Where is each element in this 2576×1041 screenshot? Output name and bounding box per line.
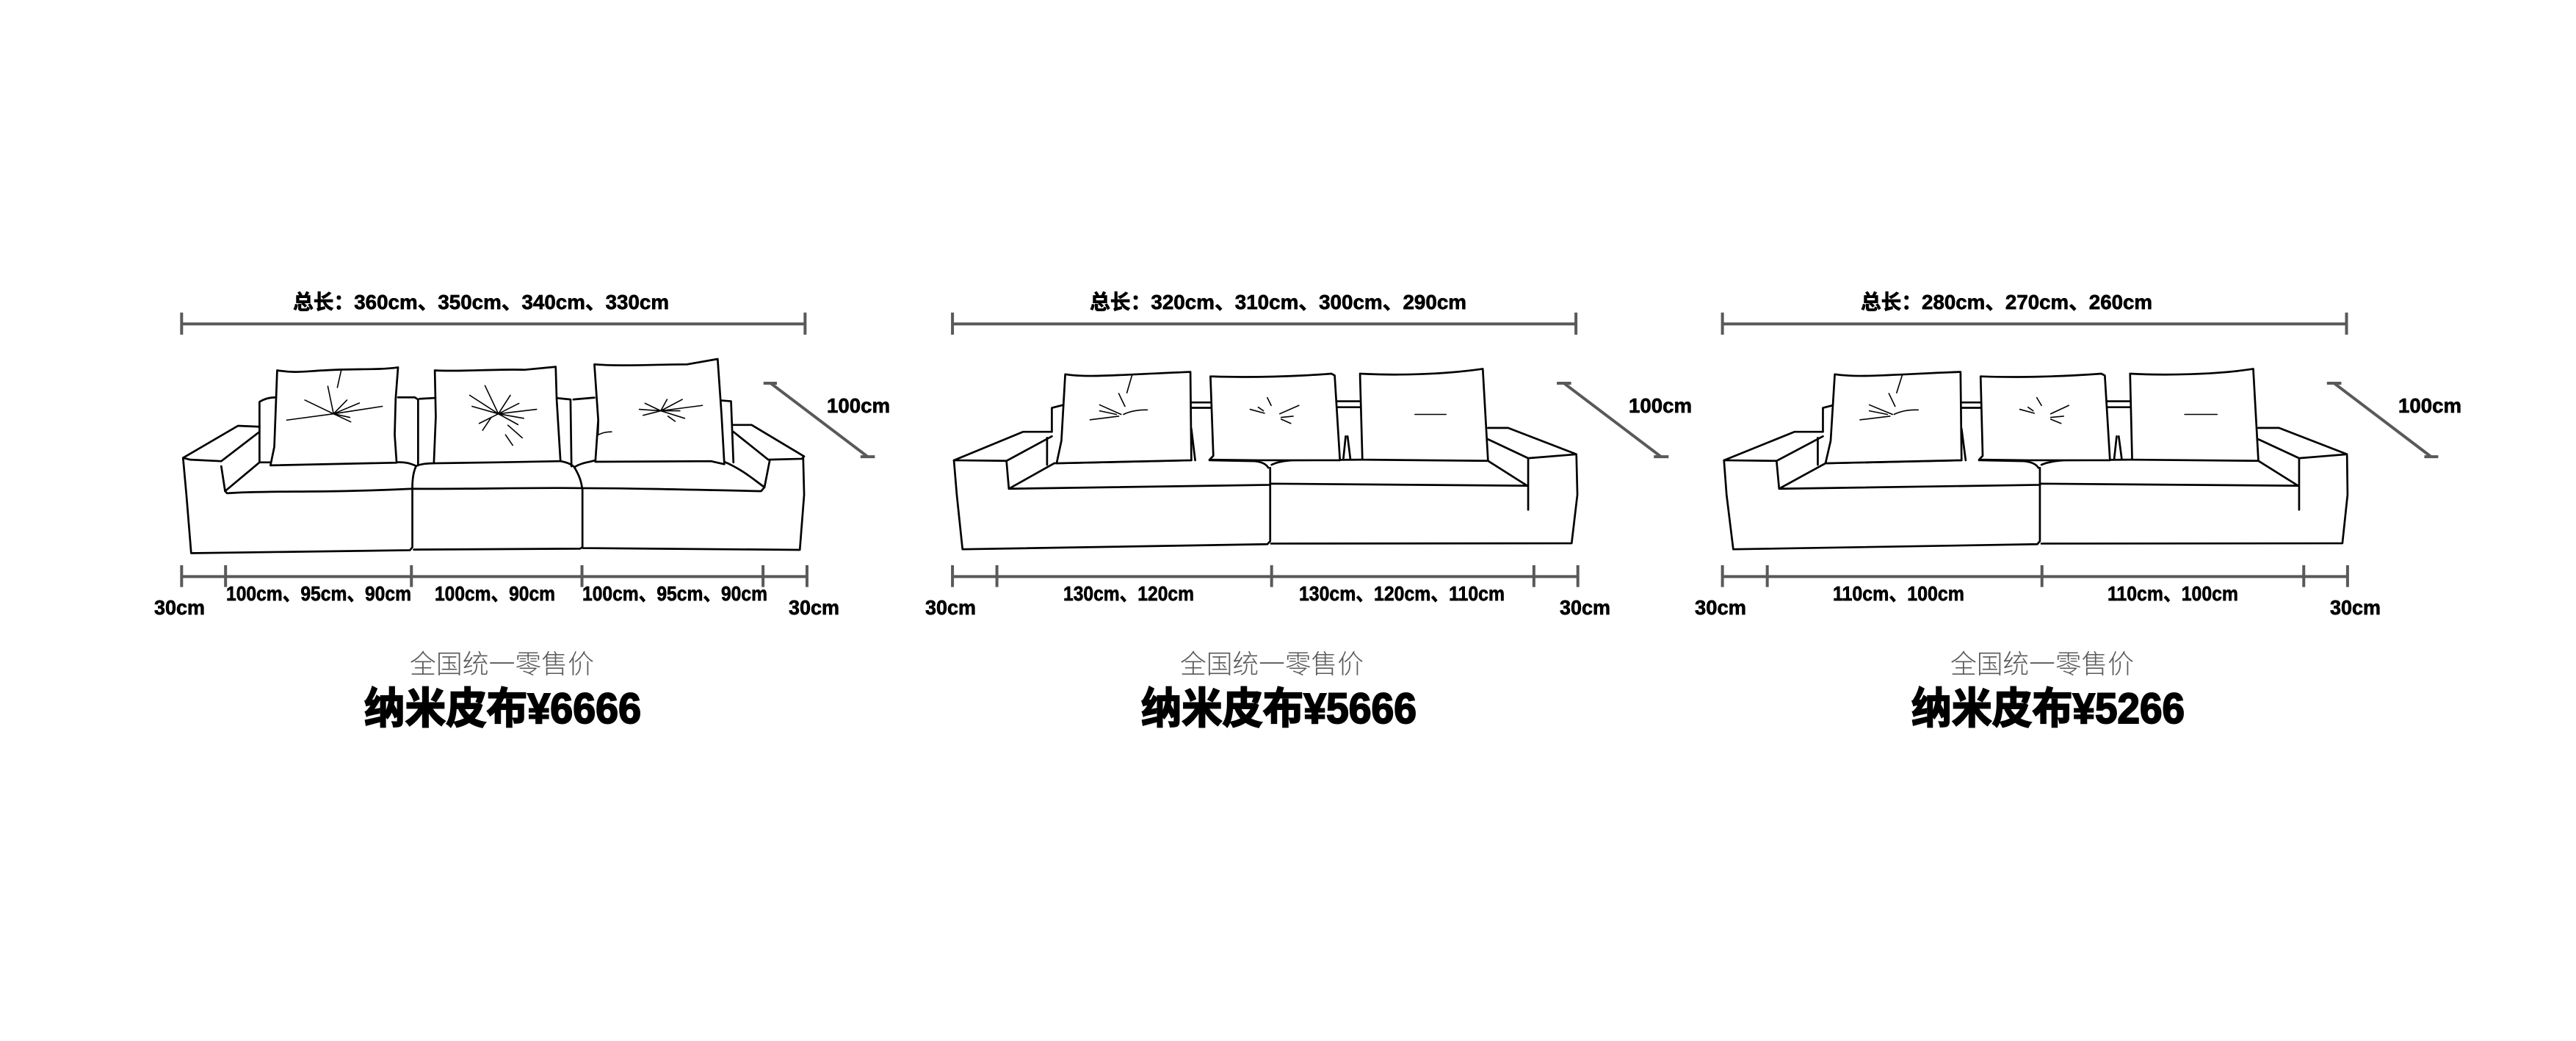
pillow right	[2130, 369, 2258, 461]
segment labels	[1695, 582, 2381, 619]
depth dimension arrow	[2327, 383, 2438, 457]
panel: three-seat sofa	[154, 291, 890, 733]
panel: large two-seat sofa	[925, 291, 1692, 733]
segment labels	[925, 582, 1610, 619]
sofa drawing: three-seat	[183, 359, 804, 554]
retail price caption: 全国统一零售价	[410, 649, 594, 679]
depth label: 100cm	[2398, 394, 2461, 417]
pillow wrinkles	[1090, 375, 1446, 424]
pillow centre	[1979, 374, 2110, 460]
total length dimension line	[181, 313, 805, 335]
total length dimension line	[1723, 313, 2346, 335]
pillow left	[1826, 372, 1961, 463]
segment labels: 100cm、95cm、90cm	[226, 582, 411, 605]
depth label: 100cm	[1629, 394, 1692, 417]
pillow left	[1057, 372, 1191, 463]
segment labels	[154, 582, 839, 619]
segment dimension line	[952, 565, 1578, 587]
segment labels: 130cm、120cm	[1063, 582, 1194, 605]
price heading: 纳米皮布¥6666	[364, 685, 641, 733]
retail price caption: 全国统一零售价	[1180, 649, 1364, 679]
segment labels: 30cm	[2330, 596, 2381, 619]
segment dimension line	[181, 565, 807, 587]
panel: small two-seat sofa	[1695, 291, 2461, 733]
segment labels: 110cm、100cm	[1833, 582, 1964, 605]
total length label: 总长：320cm、310cm、300cm、290cm	[1090, 291, 1466, 313]
segment dimension line	[1723, 565, 2348, 587]
pillow wrinkles	[1860, 375, 2217, 424]
pillow centre	[1209, 374, 1340, 460]
total length label: 总长：360cm、350cm、340cm、330cm	[293, 291, 669, 313]
segment labels: 100cm、90cm	[435, 582, 555, 605]
pillow wrinkles	[286, 371, 702, 446]
segment labels: 100cm、95cm、90cm	[582, 582, 767, 605]
sofa drawing: small two-seat	[1724, 369, 2348, 549]
segment labels: 30cm	[154, 596, 205, 619]
segment labels: 30cm	[925, 596, 976, 619]
segment labels: 30cm	[789, 596, 839, 619]
total length label: 总长：280cm、270cm、260cm	[1861, 291, 2152, 313]
segment labels: 30cm	[1695, 596, 1746, 619]
price heading: 纳米皮布¥5666	[1141, 685, 1417, 733]
retail price caption: 全国统一零售价	[1950, 649, 2134, 679]
segment labels: 110cm、100cm	[2108, 582, 2238, 605]
total length dimension line	[952, 313, 1576, 335]
depth dimension arrow	[764, 383, 875, 457]
pillow right	[1360, 369, 1488, 461]
pillow right	[594, 359, 724, 464]
segment labels: 30cm	[1560, 596, 1610, 619]
depth label: 100cm	[827, 394, 890, 417]
price heading: 纳米皮布¥5266	[1911, 685, 2185, 733]
pillow centre	[434, 367, 560, 463]
sofa drawing: large two-seat	[954, 369, 1577, 549]
pillow left	[270, 367, 398, 465]
depth dimension arrow	[1557, 383, 1668, 457]
segment labels: 130cm、120cm、110cm	[1299, 582, 1505, 605]
